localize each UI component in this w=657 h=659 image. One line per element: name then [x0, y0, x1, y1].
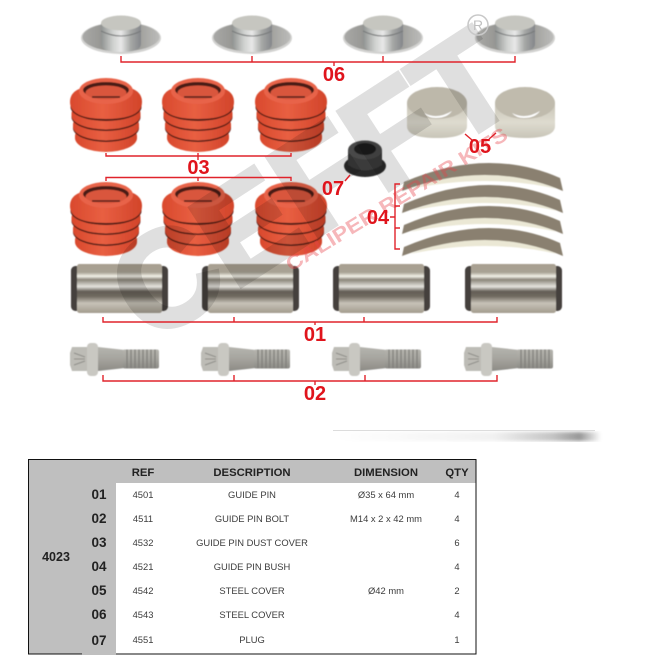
steel covers 05 [407, 87, 555, 138]
dust covers 03 [70, 78, 327, 256]
callout 02: 02 [304, 383, 326, 405]
row 07: PLUG [239, 634, 265, 645]
callout 05 [465, 133, 496, 158]
callout 05: 05 [469, 136, 491, 158]
row 01: 01 [91, 487, 107, 502]
row 01: 4501 [133, 489, 153, 500]
callout 06 [121, 56, 515, 86]
row 01: 4 [454, 489, 460, 500]
callout 06: 06 [323, 64, 345, 86]
row 01: GUIDE PIN [228, 489, 276, 500]
kit number: 4023 [42, 550, 70, 564]
row 03 [91, 535, 460, 550]
registered mark: R [473, 17, 483, 33]
row 04: 04 [91, 559, 107, 574]
row 05 [91, 583, 460, 598]
callout 04 [367, 184, 400, 249]
callout 07 [322, 175, 350, 200]
row 03: 4532 [133, 537, 153, 548]
row 07: 1 [454, 634, 460, 645]
row 02: 4511 [133, 513, 153, 524]
row 05: 05 [91, 583, 107, 598]
table background panels [28, 460, 476, 655]
table border [28, 460, 476, 654]
table headers [132, 467, 469, 479]
table headers: REF [132, 467, 154, 479]
table headers: DESCRIPTION [213, 467, 291, 479]
row 04: GUIDE PIN BUSH [214, 561, 290, 572]
row 02: GUIDE PIN BOLT [215, 513, 289, 524]
row 03: 6 [454, 537, 460, 548]
row 02: 4 [454, 513, 460, 524]
table headers: DIMENSION [354, 467, 418, 479]
row 02 [91, 511, 460, 526]
row 05: 2 [454, 585, 460, 596]
row 03: 03 [91, 535, 107, 550]
callout 04: 04 [367, 207, 390, 229]
plug 07 [344, 140, 386, 177]
row 04: 4521 [133, 561, 153, 572]
callout 03 [106, 153, 291, 181]
watermark tagline: CALIPER REPAIR KITS [282, 124, 512, 276]
row 04 [91, 559, 460, 574]
guide pins 01 [71, 264, 562, 313]
row 07: 4551 [133, 634, 153, 645]
guide pin bolts 02 [70, 343, 553, 376]
callout 01 [103, 317, 497, 346]
row 01: Ø35 x 64 mm [358, 489, 414, 500]
guide pin bushes 04 [402, 163, 563, 256]
callout 03: 03 [187, 157, 210, 179]
row 05: 4542 [133, 585, 153, 596]
row 05: Ø42 mm [368, 585, 404, 596]
row 04: 4 [454, 561, 460, 572]
steel covers 06 [81, 16, 555, 54]
callout 02 [103, 375, 497, 405]
row 06: STEEL COVER [219, 609, 285, 620]
row 06: 4 [454, 609, 460, 620]
callout 01: 01 [304, 324, 326, 346]
row 07 [91, 633, 460, 648]
row 06: 4543 [133, 609, 153, 620]
row 06 [91, 607, 460, 622]
row 05: STEEL COVER [219, 585, 285, 596]
row 06: 06 [91, 607, 107, 622]
image shadow [333, 430, 601, 441]
row 01 [91, 487, 460, 502]
table headers: QTY [445, 467, 469, 479]
watermark logo: CEFFT [84, 0, 539, 369]
callout 07: 07 [322, 178, 344, 200]
row 07: 07 [91, 633, 107, 648]
row 03: GUIDE PIN DUST COVER [196, 537, 308, 548]
row 02: 02 [91, 511, 107, 526]
row 02: M14 x 2 x 42 mm [350, 513, 422, 524]
parts table [28, 460, 476, 655]
registered mark [468, 15, 488, 35]
